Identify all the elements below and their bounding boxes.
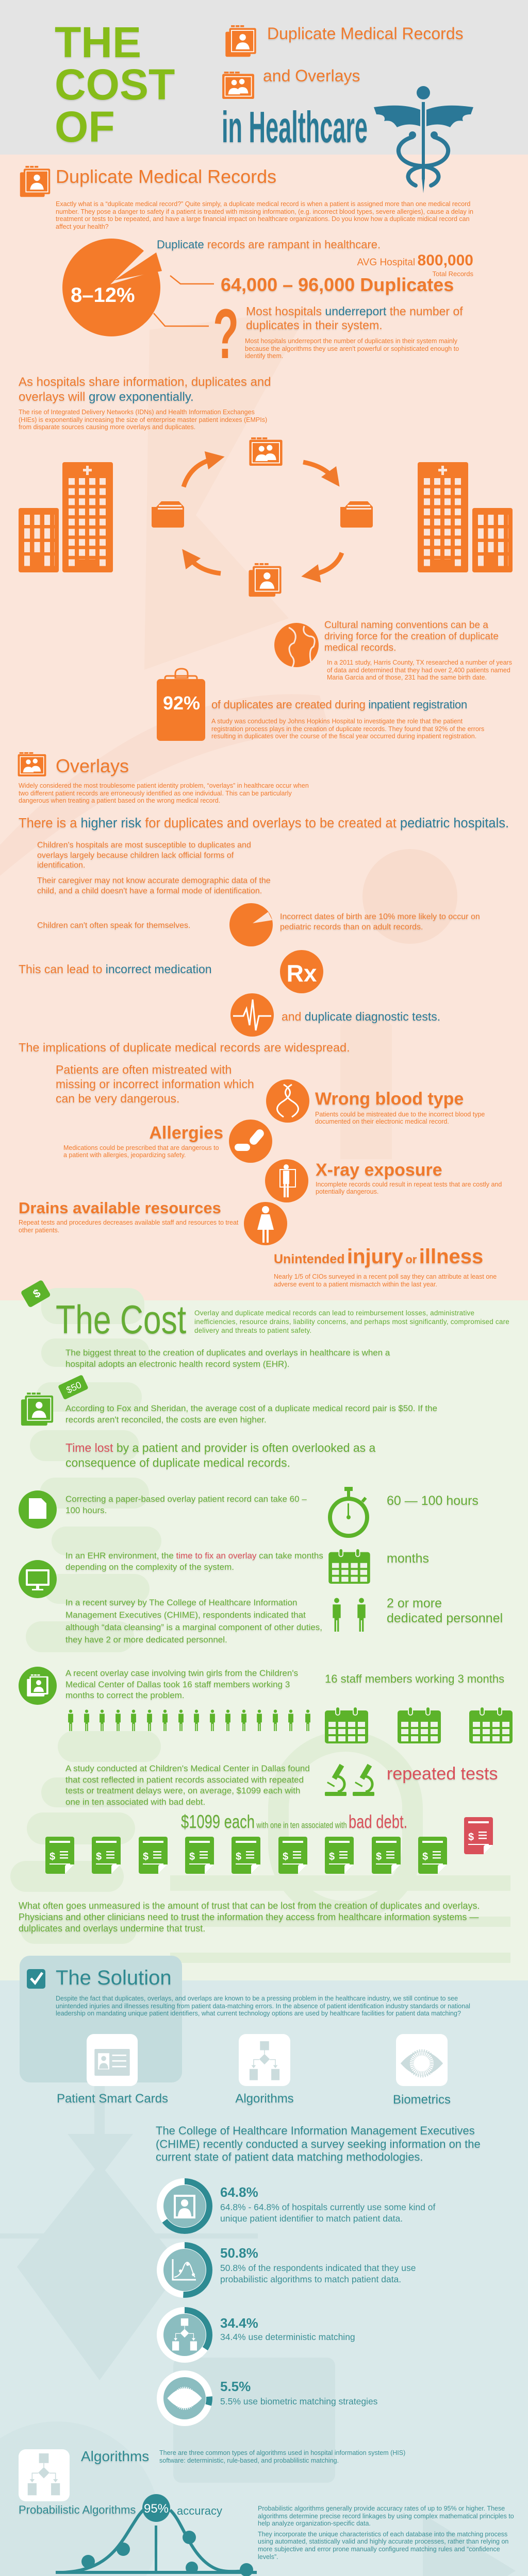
text: speak for themselves: Children can't often speak for themselves. bbox=[37, 921, 190, 930]
icon: $50 tag with record bbox=[21, 1375, 89, 1426]
stat: 50.8%: 50.8% of the respondents indicated that they use probabilistic algorithms to match patient data. bbox=[220, 2263, 416, 2284]
stat: 92%: 92% bbox=[163, 692, 200, 714]
label: patient smart cards: Patient Smart Cards bbox=[57, 2092, 168, 2106]
heading: The Solution: The Solution bbox=[56, 1967, 172, 1989]
chart: donut 64.8% bbox=[157, 2178, 212, 2234]
stat: 64.8%: 64.8% - 64.8% of hospitals currently use some kind of unique patient identifier to match patient data. bbox=[220, 2202, 435, 2224]
stat: 50.8%: 50.8% bbox=[220, 2245, 258, 2261]
headline: pediatric: There is a higher risk for duplicates and overlays to be created at pediatric hospitals. bbox=[19, 816, 509, 831]
icon box: algorithms bbox=[239, 2034, 290, 2086]
text: algorithms intro: There are three common types of algorithms used in hospital information system (HIS) software: deterministic, rule-based, and probablilistic matching. bbox=[159, 2449, 405, 2464]
text: mistreated: Patients are often mistreated with missing or incorrect information which can be very dangerous. bbox=[56, 1063, 254, 1105]
chart: donut 34.4% bbox=[157, 2307, 212, 2363]
item: drains resources: Drains available resources bbox=[19, 1199, 221, 1217]
icon: overlays heading bbox=[18, 752, 46, 776]
text: definition: Exactly what is a “duplicate medical record?” Quite simply, a duplicate medical record is when a patient is assigned more than one medical record number. They pose a danger to safety if a patient is treated with missing information, (e.g. incorrect blood types, severe allergies), cause a delay in treatment or tests to be repeated, and have a large financial impact on healthcare organizations. Do you know how a duplicate midical record can affect your health? bbox=[56, 200, 473, 230]
icon row: cost bills: $ bbox=[96, 1851, 102, 1862]
title: THE COST OF: COST bbox=[55, 60, 175, 109]
icon: question mark: ? bbox=[213, 295, 239, 374]
icon row: cost bills: $ bbox=[189, 1851, 195, 1862]
text: Harris County: In a 2011 study, Harris County, TX researched a number of years of data and determined that they had over 2,400 patients named Maria Garcia and of those, 231 had the same birth date. bbox=[327, 659, 512, 681]
stat: duplicates range: 64,000 – 96,000 Duplicates bbox=[221, 274, 454, 295]
text: cost intro: Overlay and duplicate medical records can lead to reimbursement losses, administrative inefficiencies, resource drains, liability concerns, and perhaps most significantly, compromised care delivery and threats to patient safety. bbox=[194, 1309, 509, 1334]
stat: 64.8%: 64.8% bbox=[220, 2184, 258, 2200]
icon row: cost bills: $ bbox=[143, 1851, 148, 1862]
icon: DNA circle bbox=[266, 1079, 309, 1123]
chart: donut 5.5% bbox=[157, 2370, 212, 2426]
headline: implications: The implications of duplicate medical records are widespread. bbox=[19, 1041, 350, 1054]
icon row: cost bills bbox=[45, 1817, 493, 1874]
text: probabilistic detail bbox=[258, 2505, 514, 2561]
text: trust: What often goes unmeasured is the amount of trust that can be lost from the creation of duplicates and overlays. Physicians and other clinicians need to trust the information they access from healthcare information systems — dulplicates and overlays undermine that trust. bbox=[19, 1901, 480, 1934]
icon: nurse circle bbox=[244, 1202, 287, 1245]
title: THE COST OF: THE bbox=[55, 18, 141, 66]
green section background bbox=[0, 1288, 528, 1980]
stat: 16 staff 3 months: 16 staff members working 3 months bbox=[325, 1672, 504, 1685]
orange section background bbox=[0, 155, 528, 1300]
item: drains resources: Repeat tests and procedures decreases available staff and resources to treat other patients. bbox=[19, 1219, 238, 1234]
item: allergies bbox=[63, 1123, 223, 1159]
headline: time lost: Time lost by a patient and provider is often overlooked as a consequence of duplicate medical records. bbox=[65, 1441, 375, 1469]
icon row: 3 calendars bbox=[325, 1706, 513, 1743]
item: wrong blood type: Wrong blood type bbox=[315, 1089, 464, 1109]
headline: inpatient registration: of duplicates are created during inpatient registration bbox=[211, 698, 467, 711]
text: twin girls: A recent overlay case involving twin girls from the Children's Medical Center of Dallas took 16 staff members working 3 months to correct the problem. bbox=[65, 1668, 298, 1700]
headline: incorrect medication: This can lead to incorrect medication bbox=[19, 962, 212, 976]
heading: The Cost: The Cost bbox=[56, 1297, 186, 1342]
text: children's hospitals: Children's hospitals are most susceptible to duplicates and overlays largely because children lack official forms of identification. bbox=[37, 841, 251, 870]
icon: paper document circle bbox=[19, 1490, 57, 1529]
icon box: patient smart cards bbox=[87, 2034, 138, 2086]
icon: stopwatch bbox=[330, 1487, 367, 1536]
icon row: 16 staff members bbox=[68, 1709, 310, 1731]
stat: AVG hospital 800,000 bbox=[357, 252, 473, 278]
text: CHIME survey intro: The College of Healthcare Information Management Executives (CHIME) recently conducted a survey seeking information on the current state of patient data matching methodologies. bbox=[156, 2124, 481, 2163]
icon: clipboard 92% bbox=[157, 669, 205, 741]
heading: Duplicate Medical Records: Duplicate Medical Records bbox=[56, 166, 276, 187]
icon: twins record circle bbox=[19, 1667, 57, 1705]
text: CHIME survey personnel: In a recent survey by The College of Healthcare Information Management Executives (CHIME), respondents indicated that although “data cleansing” is a marginal component of other duties, they have 2 or more dedicated personnel. bbox=[65, 1598, 322, 1645]
icon: pill circle bbox=[229, 1120, 272, 1163]
item: x-ray exposure bbox=[316, 1160, 502, 1195]
icon row: cost bills: $ bbox=[50, 1851, 55, 1862]
stat: AVG hospital 800,000: Total Records bbox=[433, 270, 473, 278]
label: algorithms: Algorithms bbox=[235, 2092, 294, 2106]
icon row: cost bills: $ bbox=[329, 1851, 335, 1862]
illustration: hospital exchange cycle bbox=[19, 437, 513, 597]
text: Fox and Sheridan: According to Fox and Sheridan, the average cost of a duplicate medical record pair is $50. If the records aren't reconciled, the costs are even higher. bbox=[65, 1403, 437, 1424]
title: and Overlays: and Overlays bbox=[263, 66, 360, 85]
stat: repeated tests: repeated tests bbox=[387, 1764, 498, 1784]
stat: 5.5%: 5.5% use biometric matching strategies bbox=[220, 2396, 377, 2406]
heading: probabilistic: Probabilistic Algorithms bbox=[19, 2503, 136, 2516]
stat: 34.4%: 34.4% bbox=[220, 2315, 258, 2331]
text: underreport detail: Most hospitals underreport the number of duplicates in their system mainly because the algorithms they use aren't powerful or sophisticated enough to identify them. bbox=[245, 337, 459, 360]
icon: microscopes bbox=[325, 1764, 374, 1796]
icon: two personnel bbox=[333, 1598, 366, 1632]
item: allergies: Medications could be prescribed that are dangerous to a patient with allergies, jeopardizing safety. bbox=[63, 1144, 219, 1159]
item: x-ray exposure: X-ray exposure bbox=[316, 1160, 442, 1180]
icon: globe bbox=[274, 623, 319, 669]
text: incorrect dates of birth: Incorrect dates of birth are 10% more likely to occur on pediatric records than on adult records. bbox=[280, 912, 480, 931]
stat: 8-12%: 8–12% bbox=[71, 284, 135, 307]
icon: $50 tag with record: $50 bbox=[64, 1380, 83, 1395]
text: probabilistic detail: They incorporate the unique characteristics of each database into the matching process using automated, statistically valid and highly accurate processes, rather than relying on more subjective and error prone manually configured matching rules and “confidence levels”. bbox=[258, 2531, 508, 2561]
chart: probabilistic bell curve: 95% bbox=[144, 2502, 169, 2516]
item: wrong blood type: Patients could be mistreated due to the incorrect blood type documented on their electronic medical record. bbox=[315, 1111, 485, 1125]
headline: underreport: Most hospitals underreport the number of duplicates in their system. bbox=[246, 304, 463, 332]
stat: 5.5% bbox=[220, 2379, 377, 2406]
icon: overlay record (header) bbox=[222, 72, 254, 99]
stat: 2 or more personnel: dedicated personnel bbox=[387, 1611, 503, 1625]
headline: diagnostic tests: and duplicate diagnostic tests. bbox=[282, 1010, 440, 1023]
icon: green price tag bbox=[20, 1280, 51, 1308]
text: solution intro: Despite the fact that duplicates, overlays, and overlaps are known to be a pressing problem in the healthcare industry, we still continue to see unintended injuries and illnesses resulting from patient data-matching errors. In the absence of patient identification industry standards or national leadership on mandating unique patient identifiers, what current technology options are used by healthcare facilities for patient data matching? bbox=[56, 1995, 470, 2017]
text: EHR environment: In an EHR environment, the time to fix an overlay can take months depending on the complexity of the system. bbox=[65, 1551, 323, 1571]
stat: 64.8% bbox=[220, 2184, 435, 2224]
item: drains resources bbox=[19, 1199, 238, 1234]
icon row: cost bills: $ bbox=[283, 1851, 288, 1862]
text: overlays definition: Widely considered the most troublesome patient identity problem, “overlays” in healthcare occur when two different patient records are erroneously identified as one individual. This can be particularly dangerous when treating a patient based on the wrong medical record. bbox=[19, 782, 309, 804]
header background bbox=[0, 0, 528, 155]
stat: 60-100 hours: 60 — 100 hours bbox=[387, 1494, 478, 1508]
item: allergies: Allergies bbox=[149, 1123, 223, 1143]
icon: Rx circle: Rx bbox=[287, 960, 317, 987]
label: accuracy 95: accuracy bbox=[177, 2504, 222, 2517]
icon: x-ray circle bbox=[265, 1159, 308, 1202]
chart: donut 50.8% bbox=[157, 2242, 212, 2298]
icon row: cost bills: $ bbox=[376, 1851, 382, 1862]
text: cultural naming: Cultural naming conventions can be a driving force for the creation of duplicate medical records. bbox=[324, 620, 499, 653]
solution section background bbox=[0, 1956, 528, 2576]
text: Johns Hopkins: A study was conducted by Johns Hopkins Hospital to investigate the role that the patient registration process plays in the creation of duplicate records. They found that 92% of the errors resulting in duplicates over the course of the fiscal year occurred during inpatient registration. bbox=[211, 718, 484, 740]
stat: 2 or more personnel: 2 or more bbox=[387, 1596, 442, 1611]
item: wrong blood type bbox=[315, 1089, 485, 1125]
chart: small pie 10% bbox=[229, 903, 273, 946]
headline: rampant: Duplicate records are rampant in healthcare. bbox=[157, 238, 381, 251]
heading: Algorithms: Algorithms bbox=[81, 2448, 149, 2464]
title: THE COST OF bbox=[55, 18, 175, 151]
icon: heartbeat circle bbox=[230, 993, 274, 1037]
item: x-ray exposure: Incomplete records could result in repeat tests that are costly and potentially dangerous. bbox=[316, 1181, 502, 1195]
icon: duplicate records heading icon bbox=[20, 166, 50, 197]
chart: probabilistic bell curve bbox=[56, 2494, 257, 2576]
heading: Overlays: Overlays bbox=[56, 755, 129, 776]
title: in Healthcare: in Healthcare bbox=[222, 103, 368, 152]
text: biggest threat: The biggest threat to the creation of duplicates and overlays in healthcare is when a hospital adopts an electronic health record system (EHR). bbox=[65, 1348, 390, 1368]
icon: solution checkbox bbox=[27, 1969, 45, 1989]
text: caregiver: Their caregiver may not know accurate demographic data of the child, and a child doesn't have a formal mode of identification. bbox=[37, 876, 271, 895]
item: unintended injury: Nearly 1/5 of CIOs surveyed in a recent poll say they can attribute at least one adverse event to a patient mismactch within the last year. bbox=[274, 1273, 497, 1288]
icon row: cost bills: $ bbox=[422, 1851, 428, 1862]
stat: 50.8% bbox=[220, 2245, 416, 2284]
text: IDN HIE: The rise of Integrated Delivery Networks (IDNs) and Health Information Exchanges (HIEs) is exponentially increasing the size of enterprise master patient indexes (EMPIs) from disparate sources causing more overlays and duplicates. bbox=[19, 409, 267, 431]
icon row: cost bills: $ bbox=[468, 1832, 474, 1843]
title: Duplicate Medical Records: Duplicate Medical Records bbox=[267, 24, 464, 43]
label: biometrics: Biometrics bbox=[393, 2093, 451, 2107]
text: probabilistic detail: Probabilistic algorithms generally provide accuracy rates of up to 95% or higher. These algorithms determine precise record linkages by using complex mathematical principles to help analyze organization-specific data. bbox=[258, 2505, 514, 2527]
icon: caduceus bbox=[374, 86, 473, 193]
stat: months: months bbox=[387, 1551, 429, 1566]
stat: 5.5%: 5.5% bbox=[220, 2379, 251, 2394]
text: Children's Medical Center study: A study conducted at Children's Medical Center in Dallas found that cost reflected in patient records associated with repeated tests or treatment delays were, on average, $1099 each with one in ten associated with bad debt. bbox=[65, 1764, 310, 1806]
icon box: biometrics bbox=[396, 2034, 448, 2086]
icon: duplicate record (header) bbox=[225, 25, 256, 57]
item: unintended injury: Unintended injury or illness bbox=[274, 1245, 483, 1268]
stat: $1099 each bad debt: $1099 each with one in ten associated with bad debt. bbox=[181, 1811, 407, 1832]
chart: 8-12% pie bbox=[62, 238, 214, 336]
icon row: cost bills: $ bbox=[236, 1851, 241, 1862]
icon: calendar months bbox=[328, 1548, 370, 1584]
stat: 2 or more personnel bbox=[387, 1596, 503, 1626]
stat: 34.4% bbox=[220, 2315, 355, 2342]
title: THE COST OF: OF bbox=[55, 103, 115, 151]
icon: green price tag: $ bbox=[31, 1286, 43, 1300]
stat: 34.4%: 34.4% use deterministic matching bbox=[220, 2332, 355, 2342]
icon box: algorithms detail bbox=[19, 2449, 70, 2501]
headline: grow exponentially: As hospitals share information, duplicates and overlays will grow exponentially. bbox=[19, 375, 271, 404]
icon: monitor circle bbox=[19, 1560, 57, 1598]
item: unintended injury bbox=[274, 1245, 497, 1288]
icon: Rx circle bbox=[280, 950, 323, 993]
stat: AVG hospital 800,000: AVG Hospital 800,000 bbox=[357, 252, 473, 269]
text: paper-based overlay: Correcting a paper-based overlay patient record can take 60 – 100 hours. bbox=[65, 1494, 307, 1515]
